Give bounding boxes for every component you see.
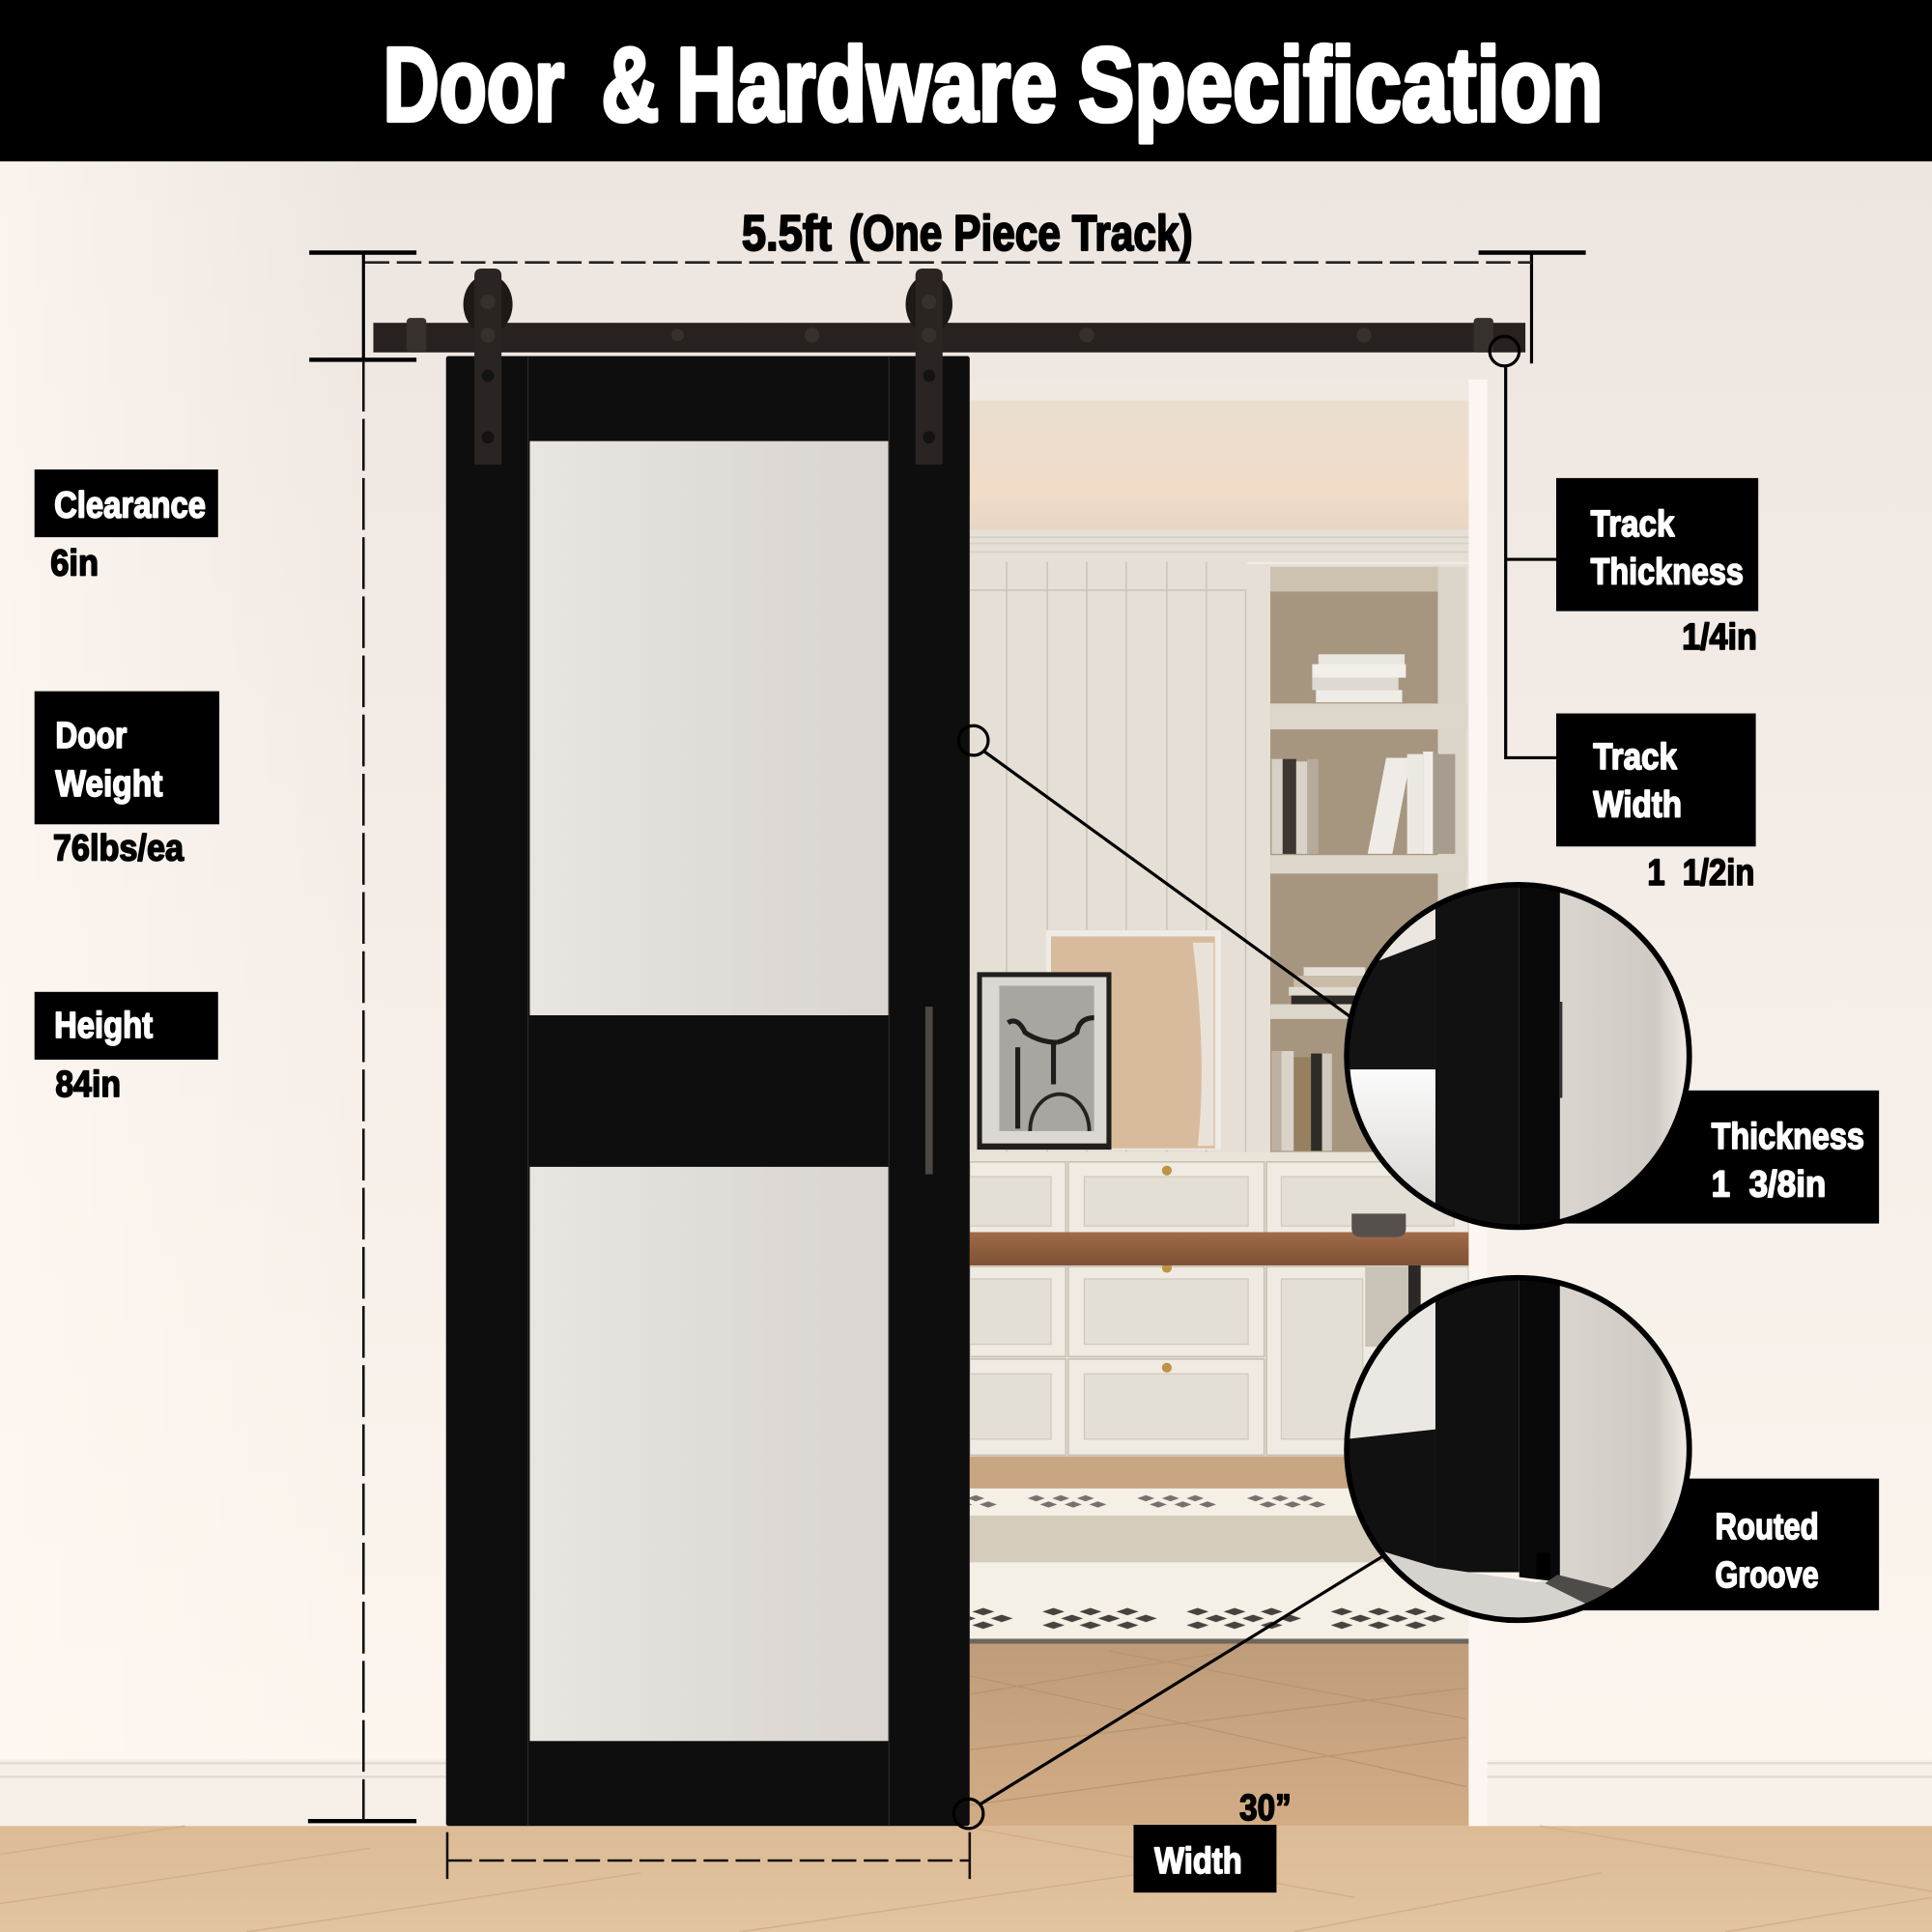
room floor xyxy=(970,1457,1468,1491)
routed groove label: Groove xyxy=(1716,1554,1819,1596)
detail circle: door thickness xyxy=(1346,884,1691,1229)
wood chevrons xyxy=(970,1651,1466,1805)
door jamb xyxy=(1468,380,1488,1826)
hanger left xyxy=(464,269,513,465)
track callout leader xyxy=(1490,336,1556,757)
baseboard xyxy=(0,1759,1932,1826)
track thickness label xyxy=(1556,478,1758,658)
track length label: 5.5ft xyxy=(742,206,832,262)
width label: Width xyxy=(1154,1840,1242,1882)
detail circle: routed groove xyxy=(1346,1276,1691,1638)
track thickness label: 1/4in xyxy=(1682,616,1757,658)
thickness label: Thickness xyxy=(1712,1116,1864,1157)
door weight label: 76lbs/ea xyxy=(53,827,185,868)
door weight label xyxy=(35,692,219,868)
glass panel top xyxy=(529,441,889,1015)
track thickness label: Thickness xyxy=(1591,552,1744,593)
routed groove label: Routed xyxy=(1716,1506,1819,1548)
title: & xyxy=(601,26,659,143)
width label xyxy=(1133,1787,1292,1892)
title: Door xyxy=(384,26,564,143)
floor xyxy=(0,1826,1932,1932)
track length label xyxy=(742,206,1193,262)
routed groove label xyxy=(1565,1479,1879,1610)
glass panel bottom xyxy=(529,1167,889,1741)
track length label: (One Piece Track) xyxy=(849,206,1193,262)
desk xyxy=(970,1213,1468,1347)
crown moulding xyxy=(970,529,1468,562)
title bar xyxy=(0,0,1932,161)
clearance label xyxy=(35,469,218,584)
books xyxy=(1319,654,1405,665)
thickness label xyxy=(1565,1091,1879,1224)
title: Hardware xyxy=(676,26,1057,143)
rug xyxy=(970,1489,1468,1644)
track xyxy=(373,318,1525,353)
bookcase xyxy=(1247,564,1468,1153)
cabinets xyxy=(970,1152,1468,1466)
clearance label: Clearance xyxy=(54,485,206,526)
leaning art print xyxy=(1046,930,1221,1150)
ceiling xyxy=(970,380,1468,529)
height dimension xyxy=(308,252,416,1821)
height label: Height xyxy=(54,1005,153,1046)
room seen through the doorway xyxy=(970,380,1468,1826)
door weight label: Door xyxy=(55,715,127,756)
width ticks and dashes xyxy=(447,1833,970,1879)
framed bicycle photo xyxy=(977,972,1112,1150)
track length dimension xyxy=(309,206,1586,363)
height label: 84in xyxy=(55,1064,121,1105)
panelled wall xyxy=(970,562,1247,1153)
track width label: 1 1/2in xyxy=(1647,852,1754,894)
title xyxy=(384,26,1603,143)
track thickness label: Track xyxy=(1591,503,1675,545)
title: Specification xyxy=(1078,26,1603,143)
hanger right xyxy=(906,269,952,465)
door weight label: Weight xyxy=(55,763,163,805)
track width label: Width xyxy=(1593,784,1682,826)
door xyxy=(446,356,970,1826)
thickness label: 1 3/8in xyxy=(1712,1164,1826,1206)
track width label xyxy=(1556,714,1756,894)
clearance label: 6in xyxy=(50,543,99,584)
groove leader xyxy=(953,1555,1385,1829)
thickness leader xyxy=(958,725,1351,1018)
width label: 30” xyxy=(1239,1787,1292,1829)
height label xyxy=(35,992,218,1105)
track width label: Track xyxy=(1593,736,1678,778)
handle xyxy=(925,1007,933,1175)
